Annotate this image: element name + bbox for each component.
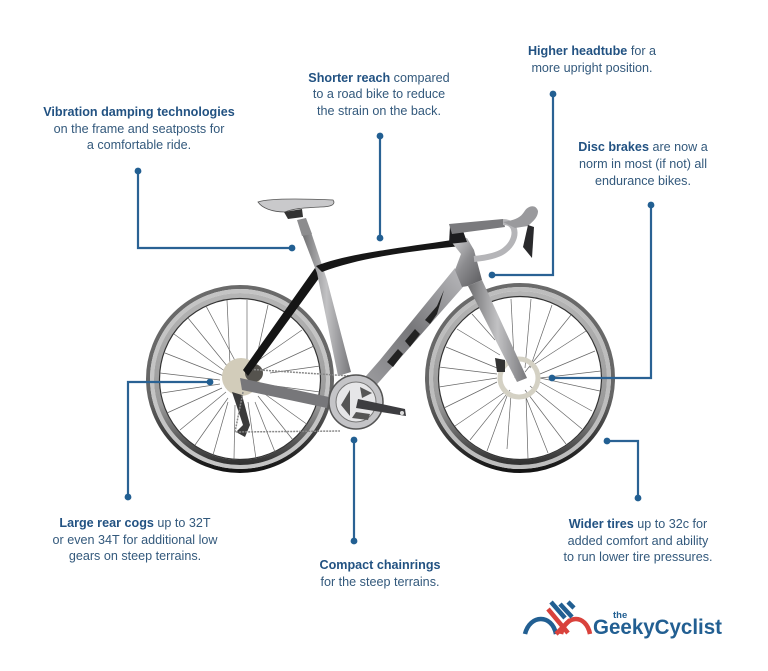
callout: shorter reach: [308, 71, 450, 241]
text: wider tires: Wider tires up to 32c for: [569, 517, 707, 531]
text: wider tires: [563, 517, 713, 564]
bicycle illustration: [148, 199, 613, 471]
text: higher headtube: Higher headtube for a: [528, 44, 656, 58]
text: shorter reach: Shorter reach compared: [308, 71, 450, 85]
text: vibration damping: [43, 105, 235, 152]
logo icon: [525, 602, 590, 634]
text: large rear cogs: [52, 516, 218, 563]
connector: vibration damping: [135, 168, 295, 251]
text: higher headtube: [528, 44, 656, 75]
text: compact chainrings: for the steep terrains.: [320, 575, 440, 589]
top tube: [316, 240, 462, 272]
callout: higher headtube: [489, 44, 656, 278]
callout: vibration damping: [43, 105, 295, 251]
connector: compact chainrings: [351, 437, 357, 544]
text: shorter reach: to a road bike to reduce: [313, 87, 445, 101]
head tube: [449, 238, 482, 287]
text: large rear cogs: or even 34T for additional low: [52, 533, 218, 547]
logo wordmark: the: [613, 610, 627, 621]
text: shorter reach: the strain on the back.: [317, 104, 441, 118]
callout: wider tires: [563, 438, 713, 564]
connector: disc brakes: [549, 202, 654, 381]
text: higher headtube: more upright position.: [531, 61, 653, 75]
chain: [235, 369, 350, 432]
callout: large rear cogs: [52, 379, 218, 563]
down tube: [345, 268, 463, 400]
text: vibration damping: a comfortable ride.: [87, 138, 191, 152]
seat stay: [243, 268, 322, 376]
connector: wider tires: [604, 438, 641, 501]
text: large rear cogs: gears on steep terrains.: [69, 549, 201, 563]
connector: shorter reach: [377, 133, 383, 241]
callout: compact chainrings: [319, 437, 441, 589]
text: wider tires: added comfort and ability: [568, 534, 709, 548]
text: disc brakes: [578, 140, 708, 188]
text: shorter reach: [308, 71, 450, 118]
text: compact chainrings: Compact chainrings: [319, 558, 441, 572]
stem and handlebar: [449, 206, 538, 259]
crankset: [329, 375, 406, 429]
text: disc brakes: Disc brakes are now a: [578, 140, 708, 154]
text: vibration damping: Vibration damping technologies: [43, 105, 235, 119]
rear wheel: [148, 287, 332, 471]
text: disc brakes: endurance bikes.: [595, 174, 691, 188]
seatpost: [297, 218, 312, 236]
logo: the Geeky Cyclist: [525, 602, 722, 639]
saddle: [258, 199, 334, 212]
text: vibration damping: on the frame and seatposts for: [54, 122, 224, 136]
front wheel: [427, 285, 613, 471]
chain stay: [240, 378, 329, 408]
text: large rear cogs: Large rear cogs up to 32T: [59, 516, 211, 530]
text: wider tires: to run lower tire pressures.: [563, 550, 713, 564]
fork: [468, 280, 527, 382]
seat tube: [302, 232, 351, 376]
connector: higher headtube: [489, 91, 556, 278]
connector: large rear cogs: [125, 379, 213, 500]
callout: disc brakes: [549, 140, 708, 381]
logo wordmark: GeekyCyclist: [593, 616, 722, 639]
text: compact chainrings: [319, 558, 441, 589]
text: disc brakes: norm in most (if not) all: [579, 157, 707, 171]
